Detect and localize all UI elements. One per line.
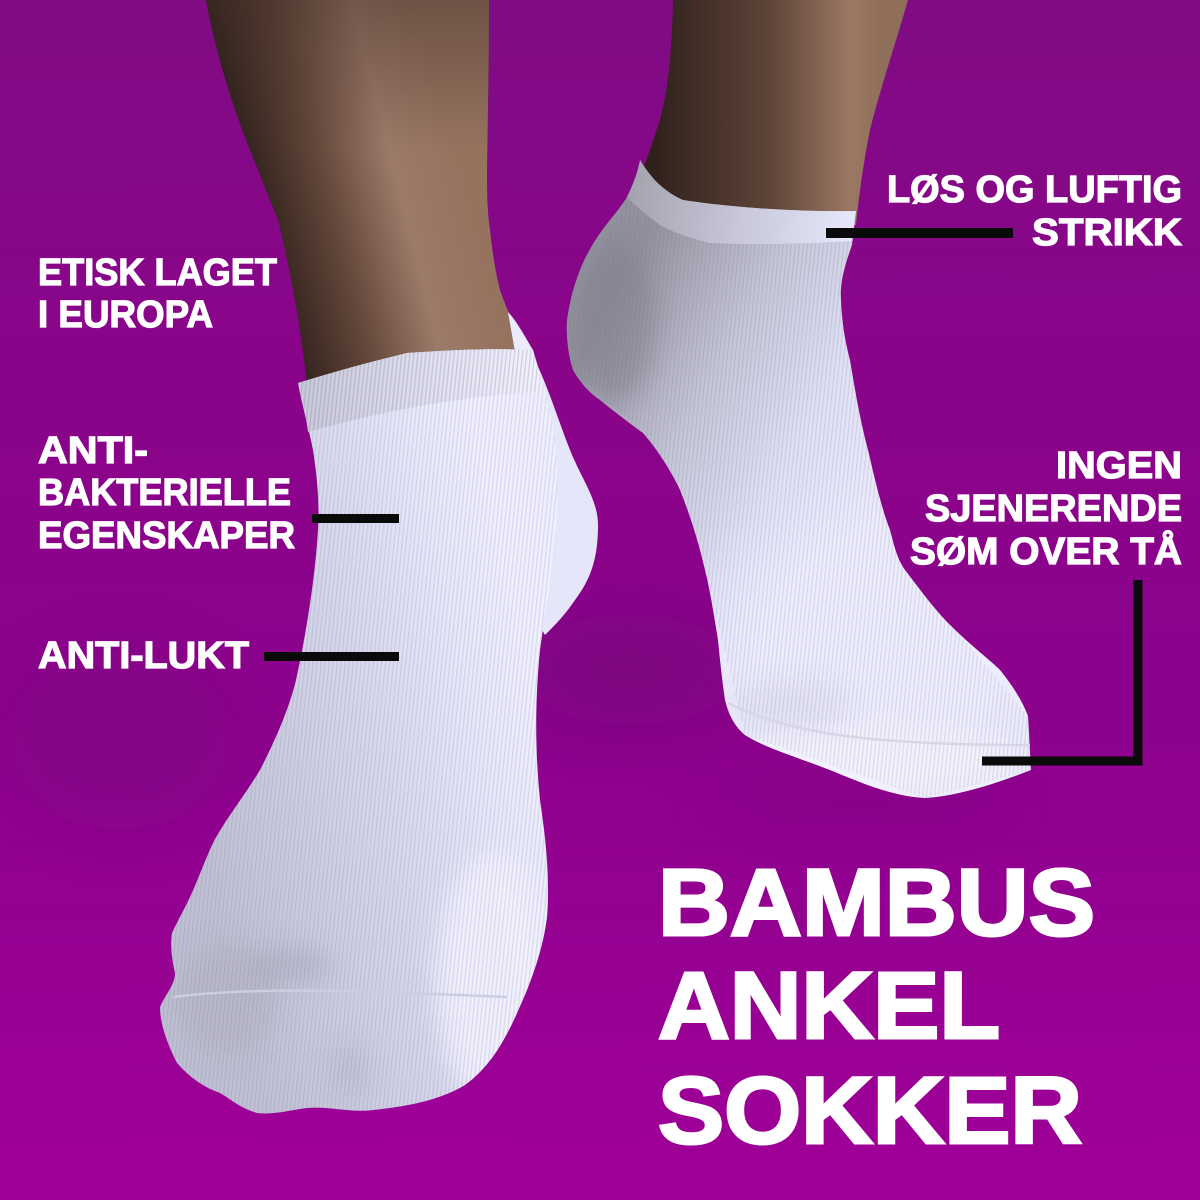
left sock cuff rib texture <box>298 349 541 432</box>
floor shadows <box>10 615 1010 830</box>
right sock cuff rib <box>627 160 856 244</box>
title: ANKEL <box>658 953 1000 1059</box>
label: made in Europe: I EUROPA <box>38 294 213 336</box>
left sock <box>150 312 598 1120</box>
left sock back tab <box>508 312 533 352</box>
callout line: anti-odor <box>264 652 399 661</box>
callout line: toe seam elbow <box>982 580 1138 761</box>
left sock heel part <box>500 350 598 635</box>
title: SOKKER <box>658 1058 1082 1164</box>
label: no toe seam: INGEN <box>1056 445 1182 487</box>
right leg <box>642 0 908 225</box>
label: antibacterial: EGENSKAPER <box>38 515 295 557</box>
label: no toe seam <box>910 445 1182 573</box>
left sock knit texture <box>150 340 560 1120</box>
title <box>658 850 1095 1164</box>
label: no toe seam: SØM OVER TÅ <box>910 529 1182 573</box>
label: loose and airy knit: STRIKK <box>1032 212 1183 254</box>
label: no toe seam: SJENERENDE <box>925 488 1182 530</box>
label: loose and airy knit: LØS OG LUFTIG <box>887 169 1182 211</box>
left leg <box>206 0 530 385</box>
left sock toe seam <box>173 991 507 997</box>
right sock knit texture <box>610 236 1030 798</box>
left sock shading <box>180 861 548 1092</box>
label: made in Europe: ETISK LAGET <box>38 252 277 294</box>
callout line: loose knit <box>826 228 1013 238</box>
title: BAMBUS <box>658 850 1095 956</box>
label: made in Europe <box>38 252 277 336</box>
callout line: antibacterial <box>312 514 399 523</box>
label: antibacterial: BAKTERIELLE <box>38 472 291 514</box>
left sock body <box>160 349 557 1113</box>
label: loose and airy knit <box>887 169 1183 254</box>
label: anti-odor: ANTI-LUKT <box>38 635 249 677</box>
right sock body <box>567 160 1031 798</box>
left sock cuff rib <box>298 349 541 432</box>
right sock foot highlight <box>575 240 1020 795</box>
label: antibacterial: ANTI- <box>38 430 148 472</box>
label: antibacterial <box>38 430 295 557</box>
right sock toe seam <box>728 703 1030 745</box>
left leg top shading <box>206 0 489 150</box>
right sock <box>567 160 1031 798</box>
